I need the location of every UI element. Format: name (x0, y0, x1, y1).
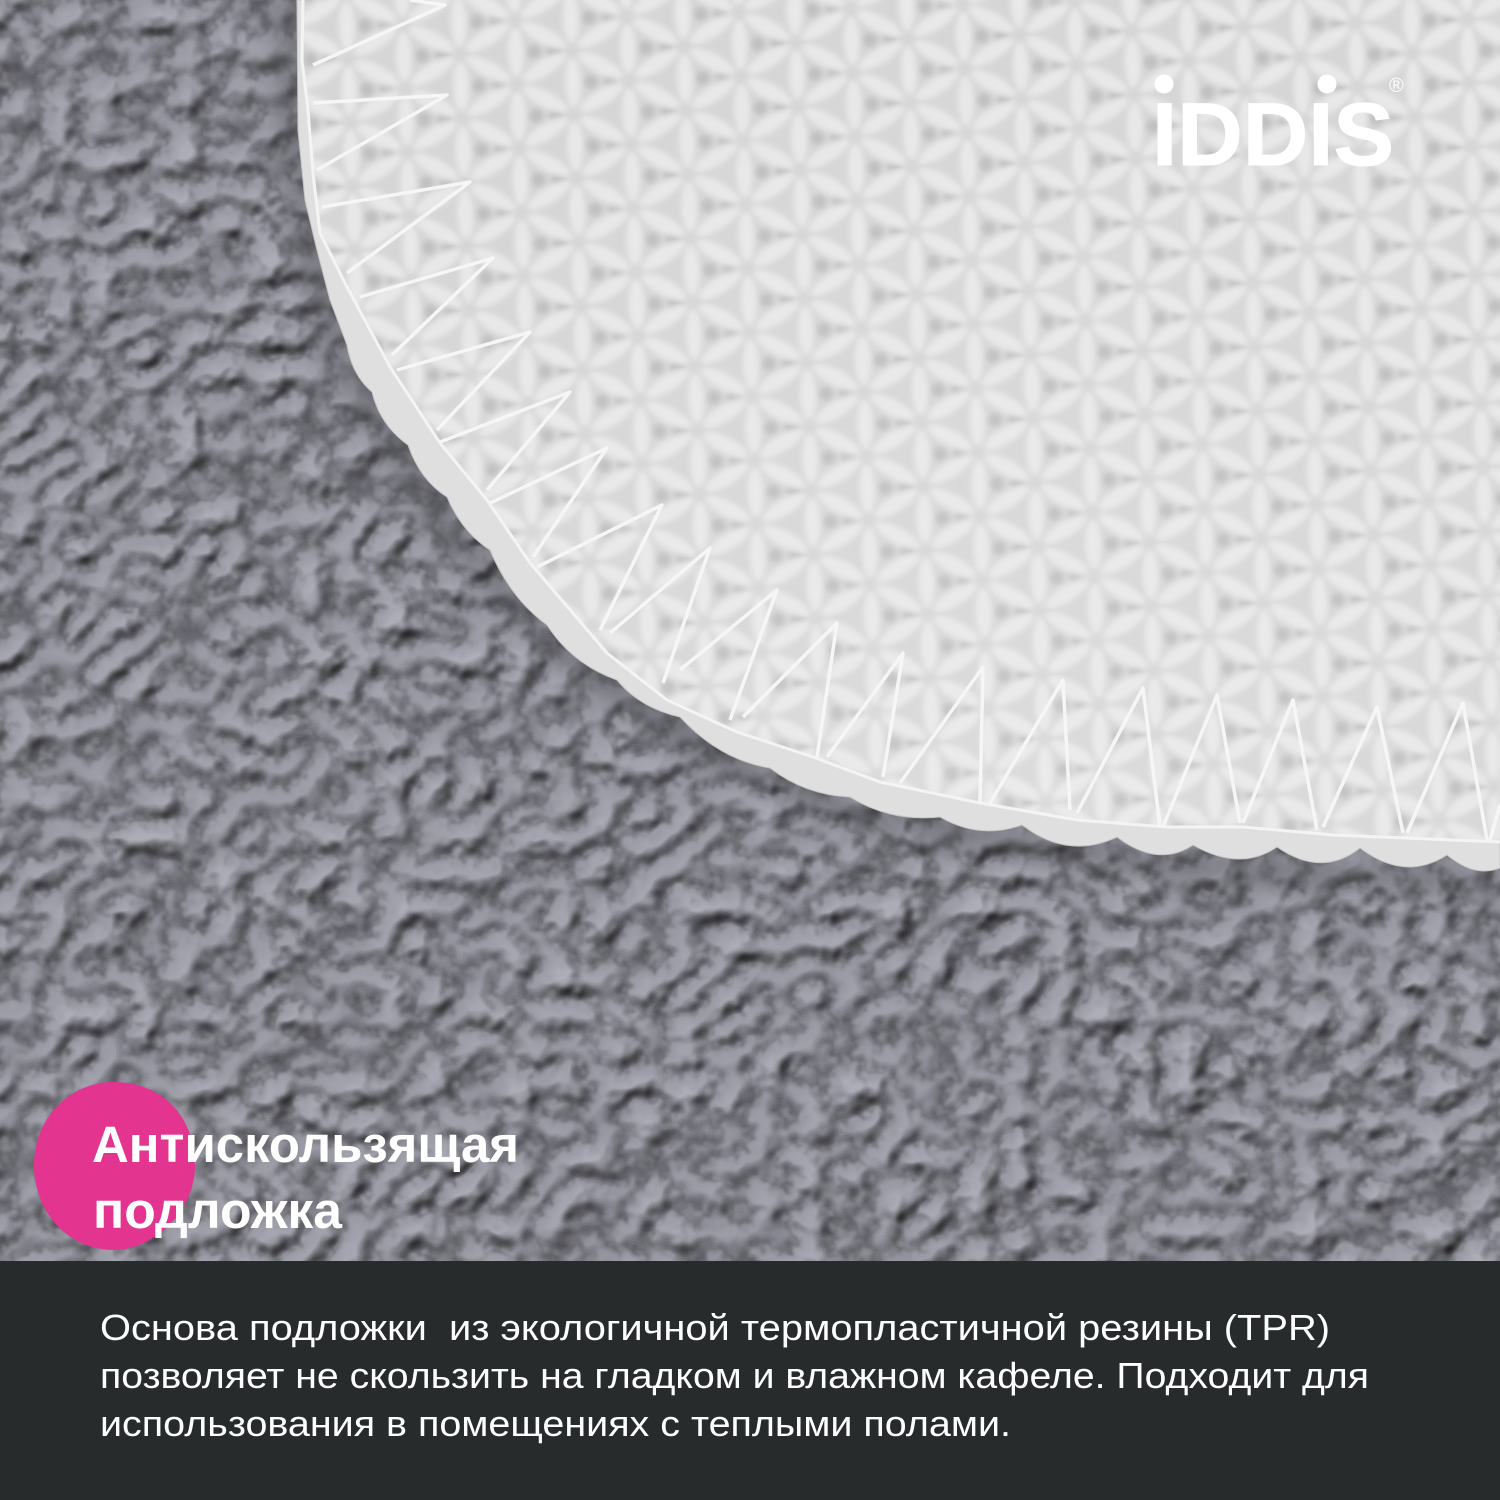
mat shadow on carpet (290, 0, 1500, 885)
edge binding thread (302, 0, 1500, 842)
scalloped rim of the mat (297, 0, 1500, 871)
dark description panel (0, 1261, 1500, 1500)
textured rubber surface (302, 0, 1500, 842)
logo: IDDIS: IDDIS (1152, 84, 1394, 184)
zigzag stitches (313, 0, 1500, 840)
description text: позволяет не скользить на гладком и влажном кафеле. Подходит для (100, 1355, 1369, 1396)
anti-slip backing mat (297, 0, 1500, 871)
heading (92, 1116, 519, 1239)
description text: Основа подложки из экологичной термопластичной резины (TPR) (100, 1307, 1330, 1348)
description text: использования в помещениях с теплыми полами. (100, 1403, 1011, 1444)
heading: подложка (93, 1182, 343, 1239)
description text (100, 1307, 1369, 1444)
logo: IDDIS: ® (1389, 75, 1404, 97)
pink circle accent (34, 1082, 195, 1250)
soft light on surface (302, 0, 1500, 842)
heading: Антискользящая (92, 1116, 519, 1173)
